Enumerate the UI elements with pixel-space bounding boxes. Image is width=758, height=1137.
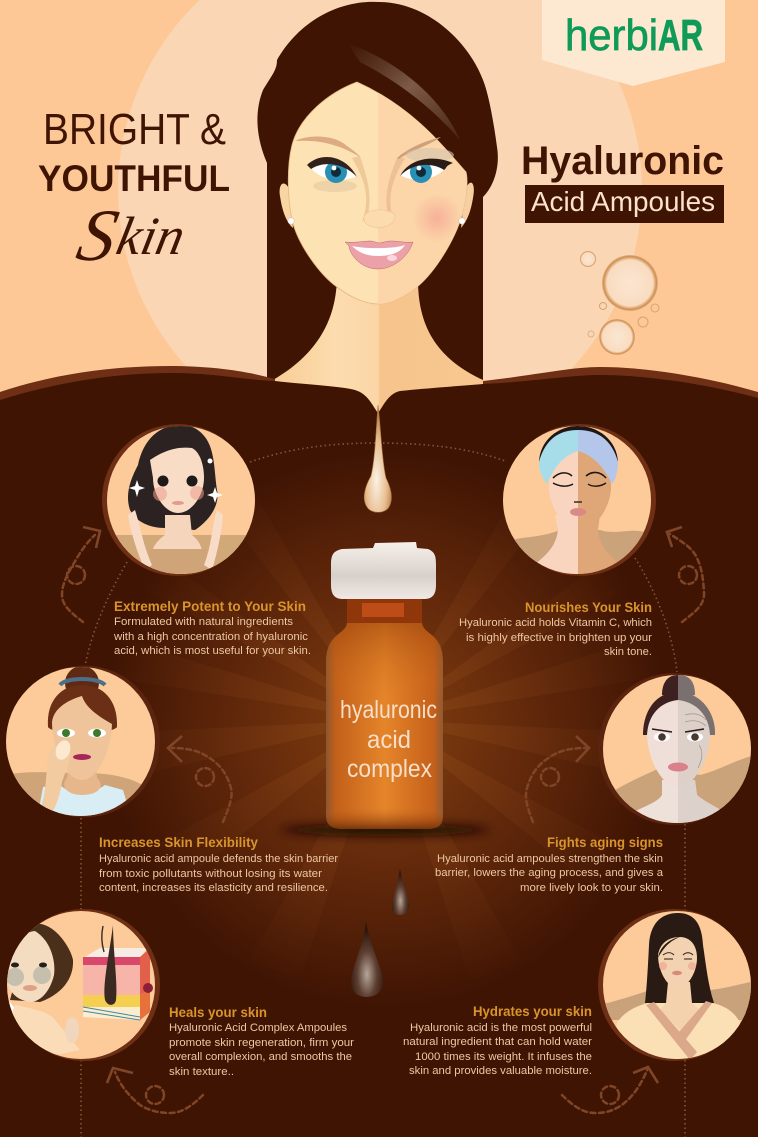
text: Nourishes Your Skin: skin tone.: [604, 646, 652, 658]
small brown drop: [392, 868, 409, 915]
text: Hydrates your skin: [403, 1003, 592, 1077]
text: Extremely Potent to Your Skin: [113, 598, 311, 657]
text: Extremely Potent to Your Skin: Extremely Potent to Your Skin: [114, 598, 306, 614]
bottle shadow: [280, 824, 490, 836]
text: Nourishes Your Skin: is highly effective in brighten up your: [466, 632, 652, 644]
text: Increases Skin Flexibility: Increases Skin Flexibility: [99, 834, 258, 850]
lips: [345, 241, 413, 269]
right eye: [400, 159, 453, 183]
cap: [331, 542, 436, 599]
text: Heals your skin: Hyaluronic Acid Complex Ampoules: [169, 1022, 348, 1034]
blush: [412, 193, 462, 243]
arrow: to panel 1: [62, 527, 100, 622]
text: Increases Skin Flexibility: from toxic pollutants without losing its water: [99, 868, 322, 880]
text: Hydrates your skin: 1000 times its weight. It infuses the: [415, 1051, 592, 1063]
serum drop from chin: [364, 405, 391, 512]
panel 1: glowing skin woman: [100, 424, 265, 580]
sunburst rays: [60, 450, 700, 980]
text: Hydrates your skin: Hyaluronic acid is the most powerful: [410, 1022, 592, 1034]
dotted connecting ring: [81, 443, 685, 1137]
top-left heading: Bright & Youthful Skin: YOUTHFUL: [38, 158, 230, 199]
arrow: to panel 3: [168, 736, 232, 822]
text: Heals your skin: skin texture..: [169, 1066, 234, 1078]
text: Extremely Potent to Your Skin: Formulated with natural ingredients: [114, 616, 294, 628]
panel 3: woman with cotton pad: [5, 666, 160, 830]
hair highlight: [347, 43, 460, 140]
arrow: to panel 2: [667, 527, 704, 622]
bottle label: hyaluronic: [340, 696, 437, 724]
ampoule bottle: [280, 542, 490, 836]
hair: [257, 2, 498, 382]
logo badge: herbiAR: AR: [658, 11, 703, 60]
logo badge: herbiAR: [542, 0, 725, 86]
text: Heals your skin: promote skin regeneration, firm your: [169, 1037, 354, 1049]
product title: Hyaluronic Acid Ampoules: [521, 139, 724, 223]
text: Nourishes Your Skin: Nourishes Your Skin: [525, 599, 652, 615]
woman's face illustration: [257, 2, 498, 420]
bottle label: [340, 696, 437, 783]
text: Hydrates your skin: Hydrates your skin: [473, 1003, 592, 1019]
text: Increases Skin Flexibility: content, increases its elasticity and resilience.: [99, 882, 328, 894]
logo badge: herbiAR: herbi: [565, 11, 658, 60]
dark brown lower background: [0, 366, 758, 1137]
top-left heading: Bright & Youthful Skin: [38, 105, 230, 277]
arrow: to panel 4: [526, 736, 589, 822]
top-left heading: Bright & Youthful Skin: kin: [112, 206, 191, 266]
panel 4: half-aged woman: [598, 673, 758, 830]
text: Heals your skin: overall complexion, and smooths the: [169, 1051, 352, 1063]
top-left heading: Bright & Youthful Skin: S: [70, 195, 125, 277]
text: Fights aging signs: [435, 834, 664, 894]
text: Fights aging signs: barrier, lowers the aging process, and gives a: [435, 867, 664, 879]
text: Fights aging signs: more lively look to your skin.: [520, 882, 663, 894]
panel 6: woman with long hair: [598, 909, 758, 1065]
panel 2: woman with headband: [503, 424, 656, 576]
earrings: [288, 218, 294, 224]
arrow: to panel 5: [107, 1068, 203, 1113]
text: Fights aging signs: Hyaluronic acid ampoules strengthen the skin: [437, 853, 663, 865]
eye shadow: [406, 148, 454, 162]
arrow: to panel 6: [562, 1067, 658, 1113]
text: Heals your skin: [169, 1004, 354, 1078]
large brown drop: [351, 921, 383, 997]
left eye: [307, 157, 357, 183]
neck: [272, 270, 484, 420]
contour: [352, 156, 370, 222]
product title: Hyaluronic Acid Ampoules: Hyaluronic: [521, 139, 724, 183]
bottle neck: [347, 599, 422, 623]
eyebrows: [295, 137, 360, 157]
skin layers diagram: [83, 925, 153, 1020]
product title: Hyaluronic Acid Ampoules: Acid Ampoules: [531, 186, 715, 217]
text: Heals your skin: Heals your skin: [169, 1004, 267, 1020]
text: Nourishes Your Skin: Hyaluronic acid holds Vitamin C, which: [459, 617, 652, 629]
bottle body: [326, 615, 443, 829]
top-left heading: Bright & Youthful Skin: BRIGHT &: [43, 105, 226, 154]
ears: [280, 183, 293, 228]
panel 5: skin problem and skin layers: [5, 909, 160, 1061]
face: [288, 82, 467, 304]
bottle label: acid: [367, 726, 411, 754]
text: Nourishes Your Skin: [459, 599, 652, 658]
text: Extremely Potent to Your Skin: acid, which is most useful for your skin.: [114, 645, 311, 657]
text: Hydrates your skin: skin and provides valuable moisture.: [409, 1065, 592, 1077]
text: Increases Skin Flexibility: [99, 834, 338, 894]
text: Increases Skin Flexibility: Hyaluronic acid ampoule defends the skin barrier: [99, 853, 338, 865]
text: Hydrates your skin: natural ingredient that can hold water: [403, 1036, 592, 1048]
text: Fights aging signs: Fights aging signs: [547, 834, 663, 850]
text: Extremely Potent to Your Skin: with a high concentration of hyaluronic: [113, 631, 309, 643]
bottle label: complex: [347, 755, 432, 783]
peach header background: [0, 0, 758, 452]
water bubbles: [580, 251, 659, 355]
nose: [364, 210, 395, 228]
